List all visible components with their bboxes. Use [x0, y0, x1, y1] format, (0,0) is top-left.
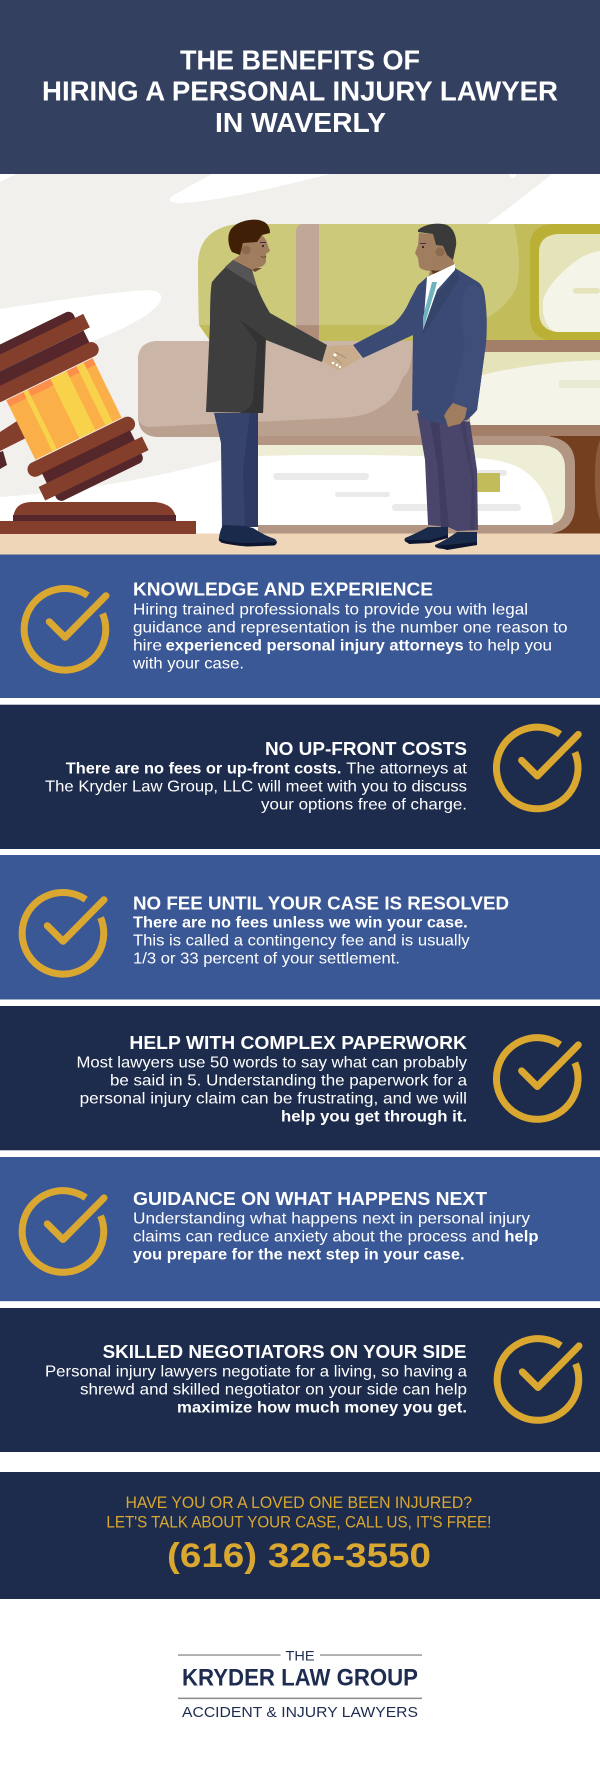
- text block: your options free of charge.: [261, 796, 467, 813]
- callout text: [106, 1494, 491, 1531]
- logo: [178, 1647, 422, 1721]
- text block: The Kryder Law Group, LLC will meet with you to discuss: [45, 778, 467, 795]
- logo: KRYDER LAW GROUP: [182, 1664, 418, 1691]
- heading: GUIDANCE ON WHAT HAPPENS NEXT: [133, 1188, 488, 1209]
- text block: claims can reduce anxiety about the process and: [133, 1229, 500, 1246]
- logo: ACCIDENT & INJURY LAWYERS: [182, 1705, 418, 1721]
- text block: There are no fees unless we win your case.: [133, 914, 468, 931]
- icon: check circle: [22, 1191, 104, 1272]
- panel: call to action: [0, 1472, 600, 1599]
- middle tan book: [138, 340, 600, 437]
- text block: shrewd and skilled negotiator on your side can help: [80, 1382, 467, 1399]
- panel: what happens next: [0, 1157, 600, 1301]
- text block: Understanding what happens next in personal injury: [133, 1211, 530, 1228]
- text block: [132, 601, 568, 672]
- bottom book: [240, 436, 600, 534]
- person: left man in grey jacket: [206, 220, 327, 546]
- text block: 1/3 or 33 percent of your settlement.: [133, 950, 400, 967]
- text block: with your case.: [132, 655, 244, 672]
- icon: check circle: [22, 892, 104, 974]
- text block: The attorneys at: [346, 760, 467, 777]
- text block: [133, 1211, 539, 1264]
- title: [42, 45, 558, 138]
- floor: [0, 534, 600, 555]
- gavel: [0, 306, 196, 534]
- panel: complex paperwork: [0, 1006, 600, 1150]
- heading: NO FEE UNTIL YOUR CASE IS RESOLVED: [133, 892, 509, 913]
- panel: knowledge and experience: [0, 554, 600, 698]
- text block: experienced personal injury attorneys: [166, 637, 464, 654]
- callout text: LET'S TALK ABOUT YOUR CASE, CALL US, IT'S FREE!: [106, 1513, 491, 1531]
- text block: help: [504, 1229, 539, 1246]
- title: HIRING A PERSONAL INJURY LAWYER: [42, 76, 558, 107]
- text block: to help you: [468, 637, 552, 654]
- text block: Most lawyers use 50 words to say what can probably: [76, 1055, 467, 1072]
- heading: KNOWLEDGE AND EXPERIENCE: [133, 579, 433, 600]
- text block: This is called a contingency fee and is usually: [133, 932, 470, 949]
- text block: maximize how much money you get.: [177, 1400, 467, 1417]
- text block: [133, 914, 470, 967]
- title: IN WAVERLY: [215, 107, 386, 138]
- icon: check circle: [497, 1339, 579, 1420]
- text block: [45, 760, 467, 813]
- icon: check circle: [496, 727, 578, 809]
- title: THE BENEFITS OF: [180, 45, 420, 76]
- books stack: [138, 224, 600, 534]
- panel: no fee until resolved: [0, 855, 600, 1000]
- text block: There are no fees or up-front costs.: [66, 760, 341, 777]
- handshake: [323, 345, 361, 370]
- text block: guidance and representation is the number one reason to: [133, 619, 568, 636]
- person: right man in blue suit: [353, 224, 487, 550]
- panel: no up-front costs: [0, 705, 600, 849]
- text block: Hiring trained professionals to provide you with legal: [133, 601, 528, 618]
- top green book: [198, 224, 600, 341]
- heading: HELP WITH COMPLEX PAPERWORK: [129, 1032, 467, 1053]
- header panel: [0, 0, 600, 174]
- illustration: handshake with books and gavel: [0, 172, 600, 555]
- text block: hire: [133, 637, 162, 654]
- text block: help you get through it.: [281, 1109, 467, 1126]
- logo: THE: [286, 1647, 314, 1663]
- icon: check circle: [24, 588, 106, 670]
- text block: personal injury claim can be frustrating, and we will: [80, 1091, 467, 1108]
- text block: Personal injury lawyers negotiate for a living, so having a: [45, 1364, 467, 1381]
- text block: be said in 5. Understanding the paperwork for a: [110, 1073, 467, 1090]
- heading: NO UP-FRONT COSTS: [265, 738, 467, 759]
- heading: SKILLED NEGOTIATORS ON YOUR SIDE: [103, 1341, 466, 1362]
- text block: [76, 1055, 467, 1126]
- text block: [45, 1364, 467, 1417]
- callout text: HAVE YOU OR A LOVED ONE BEEN INJURED?: [126, 1494, 472, 1512]
- icon: check circle: [496, 1038, 578, 1119]
- panel: skilled negotiators: [0, 1308, 600, 1452]
- phone number: (616) 326-3550: [167, 1537, 431, 1575]
- text block: you prepare for the next step in your case.: [133, 1247, 465, 1264]
